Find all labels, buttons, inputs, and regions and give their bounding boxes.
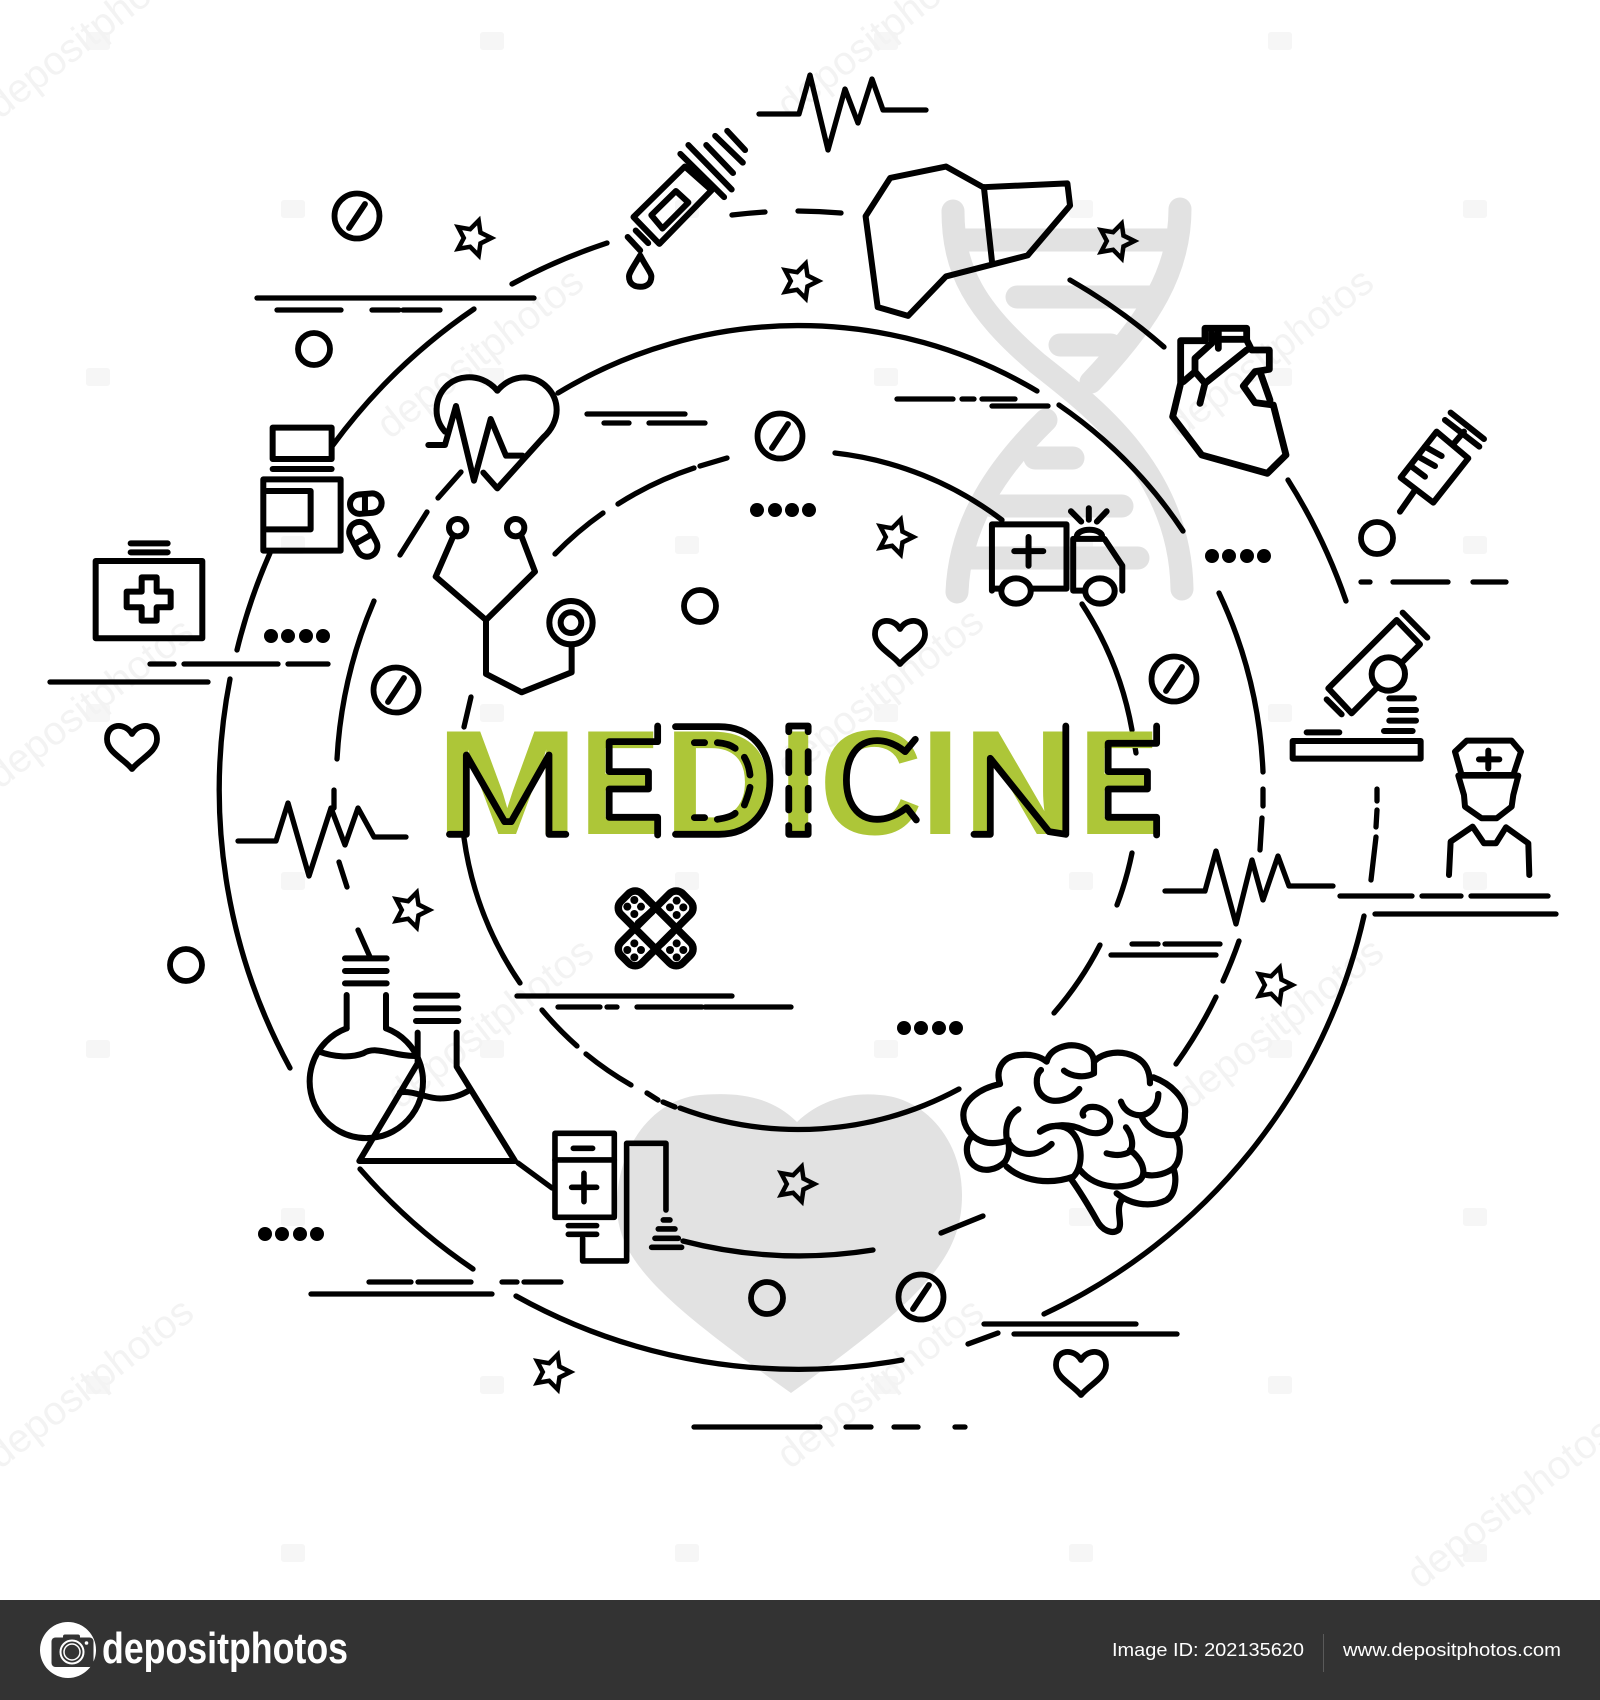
watermark text: depositphotos bbox=[1158, 259, 1382, 447]
icon: IV bag and tube bbox=[555, 1133, 682, 1261]
icon: microscope bbox=[1293, 613, 1427, 759]
title: N bbox=[963, 699, 1073, 866]
footer logo: depositphotos bbox=[102, 1624, 348, 1673]
watermark text: depositphotos bbox=[768, 599, 992, 787]
watermark text: depositphotos bbox=[768, 1289, 992, 1477]
icon: pipette with drop bbox=[628, 131, 745, 287]
title: I bbox=[921, 700, 959, 866]
ECG line left bbox=[238, 803, 406, 876]
outer ring segments bbox=[219, 211, 1377, 1369]
icon: doctor bbox=[1449, 741, 1529, 875]
ECG line top bbox=[759, 75, 926, 150]
icon: bandage bbox=[614, 887, 697, 970]
icon: syringe bbox=[1400, 413, 1484, 512]
title: E bbox=[1079, 699, 1159, 866]
dot rows bbox=[258, 503, 1271, 1241]
title line art accent bbox=[449, 726, 1157, 835]
watermark text: depositphotos bbox=[368, 259, 592, 447]
icon: brain bbox=[963, 1045, 1185, 1232]
ECG line right bbox=[1165, 851, 1333, 924]
title: M bbox=[435, 700, 579, 866]
title: E bbox=[580, 699, 660, 866]
icon: anatomical heart bbox=[1173, 328, 1286, 473]
icon: round flask bbox=[310, 958, 423, 1138]
footer image id: Image ID: 202135620 bbox=[1112, 1639, 1304, 1660]
icon: heart with pulse bbox=[428, 377, 557, 488]
footer logo bbox=[40, 1622, 348, 1678]
pill markers bbox=[334, 194, 1196, 1320]
inner ring segments bbox=[464, 453, 1136, 1129]
watermark text: depositphotos bbox=[1168, 929, 1392, 1117]
footer website: www.depositphotos.com bbox=[1342, 1639, 1561, 1660]
title bbox=[435, 699, 1159, 866]
stars bbox=[396, 221, 1292, 1389]
icon: liver bbox=[866, 167, 1070, 316]
icon: stethoscope bbox=[436, 519, 593, 692]
watermark text: depositphotos bbox=[378, 929, 602, 1117]
icon: pill bottle and capsules bbox=[263, 428, 382, 560]
title: I bbox=[779, 700, 817, 866]
title: C bbox=[819, 699, 923, 866]
small hearts bbox=[107, 621, 1106, 1395]
gray DNA helix bbox=[953, 209, 1182, 592]
middle ring segments bbox=[334, 326, 1263, 1256]
small circle markers bbox=[170, 333, 1393, 1314]
footer bar bbox=[0, 1600, 1600, 1700]
horizontal accent lines bbox=[50, 298, 1556, 1427]
title: D bbox=[664, 699, 773, 866]
icon: ambulance bbox=[992, 508, 1122, 604]
gray heart bbox=[617, 1094, 962, 1393]
icon: first aid kit bbox=[96, 543, 202, 638]
icon: conical flask bbox=[359, 996, 515, 1161]
